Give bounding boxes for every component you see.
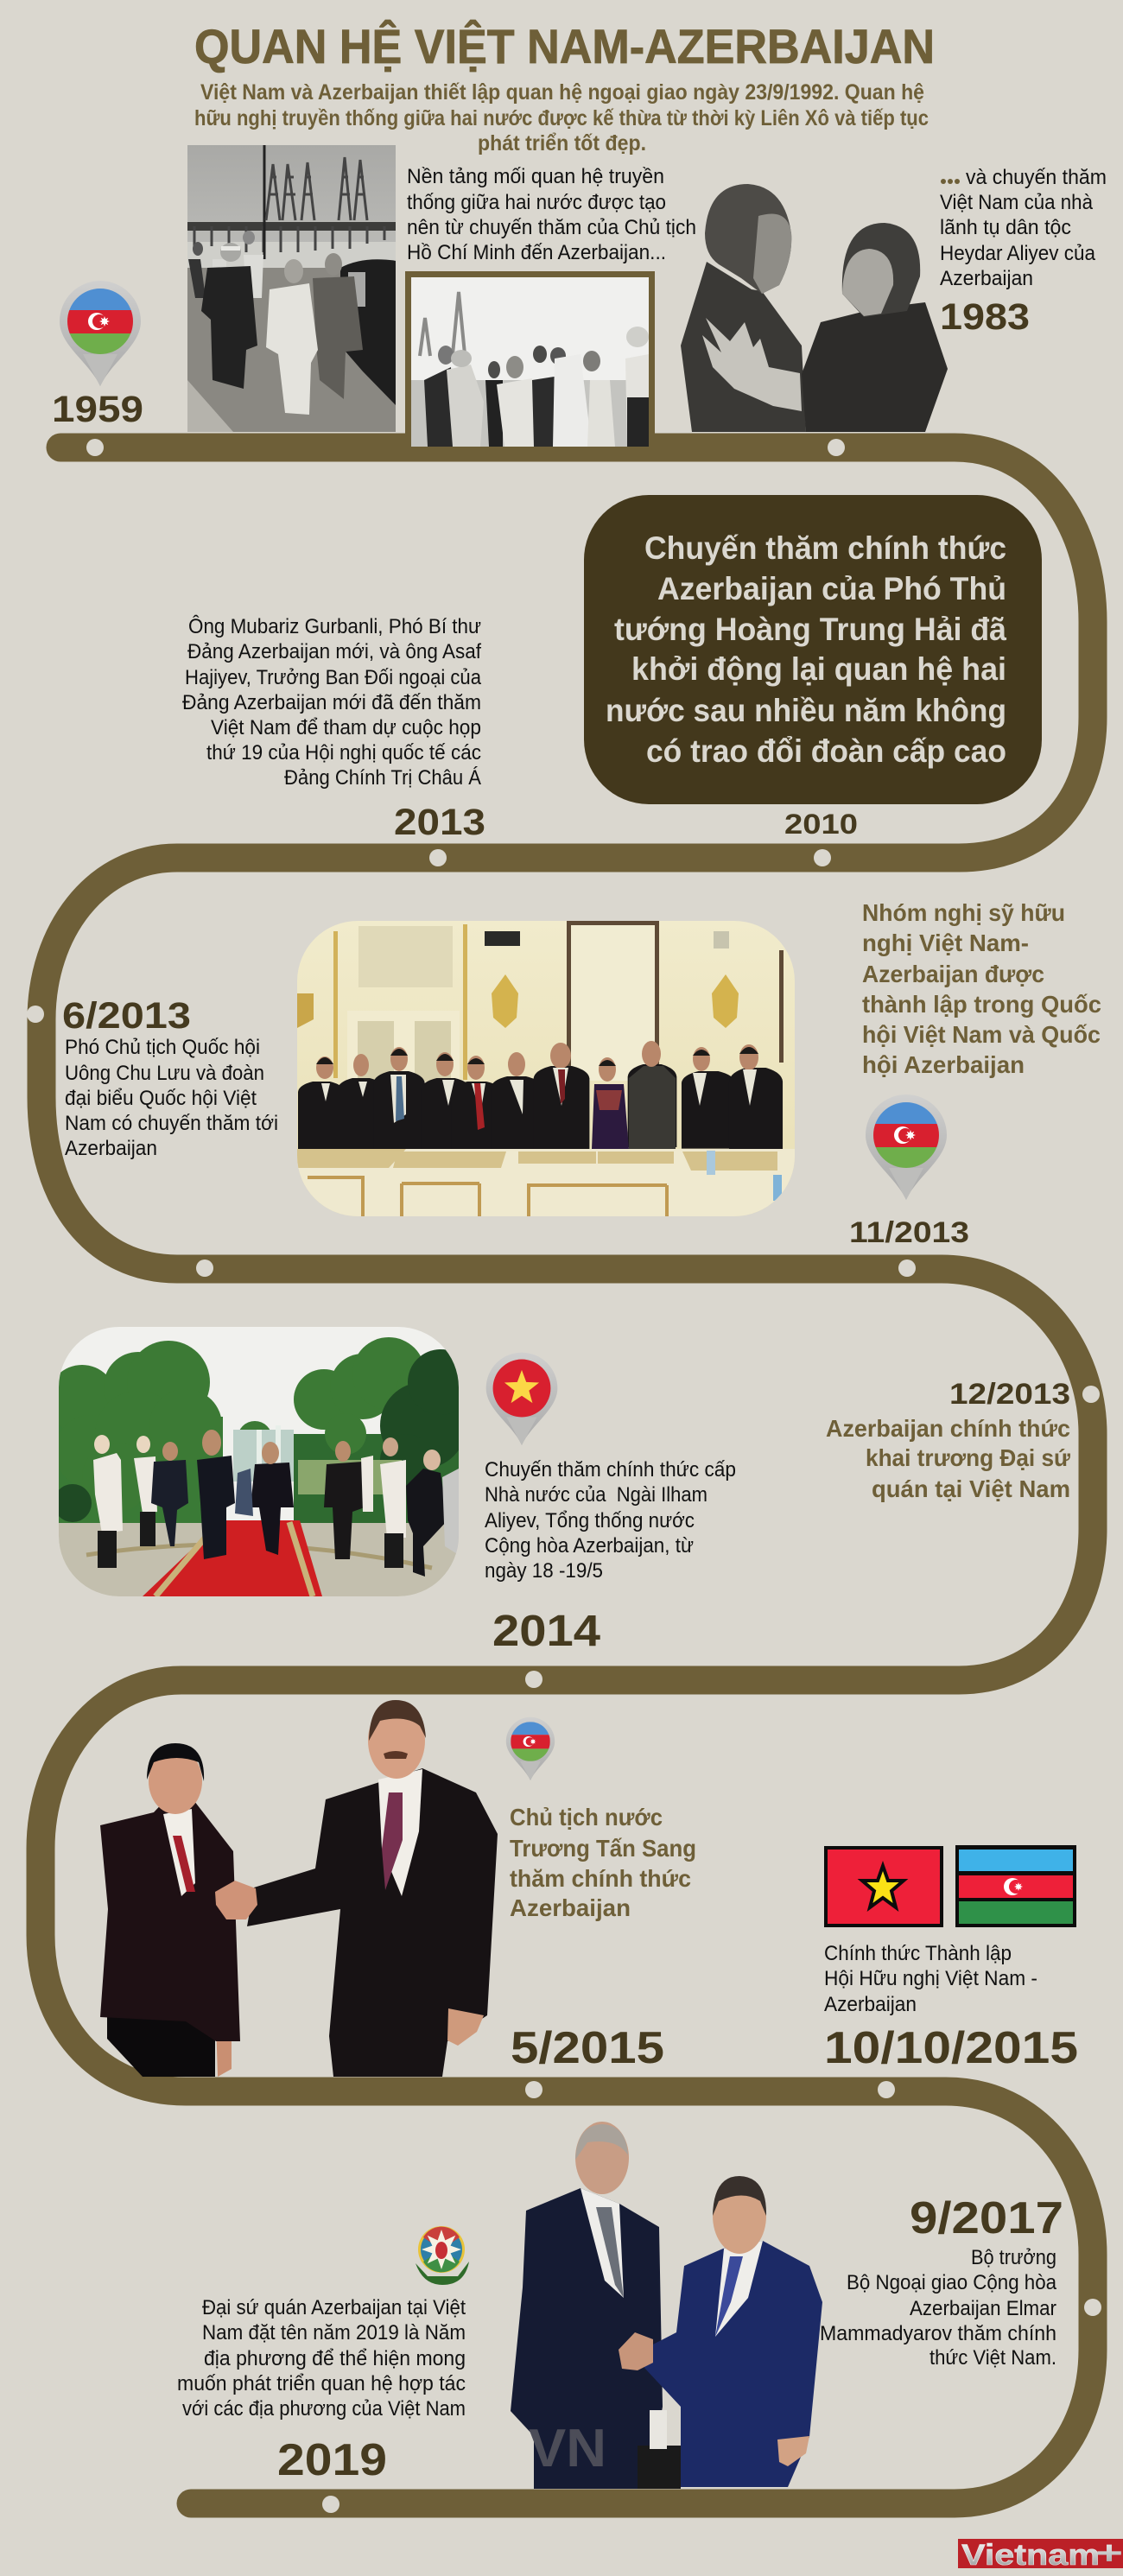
text: embassy opening: Azerbaijan chính thức (826, 1415, 1070, 1442)
text: friendship parliamentarians group: Nhóm nghị sỹ hữu (862, 899, 1065, 926)
text: foundation of relations: Nền tảng mối quan hệ truyền (407, 165, 664, 188)
text: friendship parliamentarians group: thành lập trong Quốc (862, 991, 1101, 1018)
text: friendship parliamentarians group: hội Azerbaijan (862, 1051, 1025, 1078)
text: Mammadyarov visit: Bộ trưởng (971, 2246, 1056, 2269)
year 11/2013: 11/2013 (849, 1216, 969, 1249)
photo: presidents handshake 2015 (100, 1700, 498, 2077)
text: Mammadyarov visit (820, 2246, 1057, 2370)
text: foundation of relations: thống giữa hai nước được tạo (407, 191, 666, 214)
panel: 2010 visit callout: khởi động lại quan hệ hai (631, 651, 1006, 687)
subtitle: hữu nghị truyền thống giữa hai nước được kế thừa từ thời kỳ Liên Xô và tiếp tục (194, 106, 929, 130)
panel: 2010 visit callout: Azerbaijan của Phó Thủ (657, 571, 1006, 606)
text: embassy opening: quán tại Việt Nam (872, 1475, 1070, 1502)
year 9/2017: 9/2017 (910, 2193, 1063, 2243)
text: friendship parliamentarians group: Azerbaijan được (862, 961, 1044, 987)
text: Heydar Aliyev visit: Việt Nam của nhà (940, 191, 1094, 214)
text: foundation of relations (407, 165, 696, 264)
panel: 2010 visit callout: có trao đổi đoàn cấp cao (646, 733, 1006, 769)
panel: 2010 visit callout: Chuyến thăm chính thức (644, 530, 1006, 566)
text: Truong Tan Sang visit (510, 1804, 696, 1921)
year 12/2013: 12/2013 (949, 1378, 1070, 1411)
text: 2013 party delegation: Hajiyev, Trưởng Ban Đối ngoại của (185, 666, 482, 689)
text: Truong Tan Sang visit: thăm chính thức (510, 1865, 691, 1892)
subtitle: Việt Nam và Azerbaijan thiết lập quan hệ ngoại giao ngày 23/9/1992. Quan hệ (200, 80, 924, 105)
text: 2014 state visit: ngày 18 -19/5 (485, 1559, 603, 1583)
photo: framed group visit (405, 271, 655, 447)
year 2010: 2010 (784, 809, 858, 840)
text: Truong Tan Sang visit: Chủ tịch nước (510, 1804, 663, 1830)
icon: Azerbaijan flag (955, 1845, 1076, 1927)
text: 2014 state visit (485, 1458, 736, 1583)
text: 2014 state visit: Aliyev, Tổng thống nước (485, 1509, 695, 1532)
text: friendship association (824, 1942, 1037, 2016)
photo: delegation group in hall (297, 921, 795, 1216)
text: 2019 year of localities: Đại sứ quán Azerbaijan tại Việt (202, 2296, 466, 2319)
text: 2013 party delegation: Việt Nam để tham dự cuộc họp (211, 716, 481, 739)
text: friendship parliamentarians group (862, 899, 1101, 1078)
text: 6/2013 National Assembly visit (65, 1036, 278, 1160)
text: foundation of relations: nên từ chuyến thăm của Chủ tịch (407, 216, 696, 239)
text: 2019 year of localities: với các địa phương của Việt Nam (182, 2397, 466, 2421)
text: Heydar Aliyev visit: Heydar Aliyev của (940, 242, 1096, 265)
text: Heydar Aliyev visit (940, 166, 1107, 290)
year 2019: 2019 (277, 2435, 387, 2485)
logo: Vietnam+: Vietnam (961, 2539, 1100, 2572)
subtitle (194, 80, 929, 155)
icon: Azerbaijan small pin (506, 1717, 555, 1780)
year 1983: 1983 (940, 296, 1030, 338)
year 6/2013: 6/2013 (62, 995, 191, 1037)
timeline road (27, 439, 1101, 2513)
text: friendship parliamentarians group: nghị Việt Nam- (862, 930, 1029, 956)
text: Heydar Aliyev visit: Azerbaijan (940, 267, 1033, 290)
panel: 2010 visit callout (584, 495, 1042, 804)
text: Mammadyarov visit: thức Việt Nam. (929, 2346, 1056, 2370)
text: 2014 state visit: Chuyến thăm chính thức cấp (485, 1458, 736, 1482)
photo: red carpet welcome (48, 1327, 473, 1596)
year 5/2015: 5/2015 (511, 2023, 664, 2073)
icon: Azerbaijan pin 1959 (60, 281, 141, 386)
year 1959: 1959 (52, 389, 143, 430)
photo: foreign minister and prime minister handshake (511, 2122, 822, 2489)
text: 2019 year of localities: muốn phát triển quan hệ hợp tác (177, 2372, 466, 2395)
icon: Azerbaijan emblem (416, 2226, 469, 2285)
photo: Ho Chi Minh in Baku (187, 145, 397, 432)
text: Mammadyarov visit: Azerbaijan Elmar (910, 2297, 1056, 2320)
text: embassy opening (826, 1415, 1071, 1502)
panel: 2010 visit callout: nước sau nhiều năm không (606, 693, 1006, 728)
panel: 2010 visit callout: tướng Hoàng Trung Hải đã (614, 612, 1006, 647)
year 2013: 2013 (394, 802, 485, 843)
text: 6/2013 National Assembly visit: Nam có chuyến thăm tới (65, 1112, 278, 1135)
photo: Heydar Aliyev embrace (681, 184, 948, 432)
text: 2013 party delegation: Đảng Chính Trị Châu Á (284, 766, 481, 790)
text: 2013 party delegation: Đảng Azerbaijan mới đã đến thăm (182, 691, 481, 714)
text: Heydar Aliyev visit: lãnh tụ dân tộc (940, 216, 1071, 239)
text: 2019 year of localities: địa phương để thể hiện mong (204, 2347, 466, 2370)
text: friendship parliamentarians group: hội Việt Nam và Quốc (862, 1021, 1101, 1048)
text: 2013 party delegation: Ông Mubariz Gurbanli, Phó Bí thư (188, 614, 481, 638)
text: Mammadyarov visit: Bộ Ngoại giao Cộng hòa (847, 2271, 1057, 2294)
text: 6/2013 National Assembly visit: Azerbaijan (65, 1137, 157, 1160)
title: QUAN HỆ VIỆT NAM-AZERBAIJAN (194, 19, 935, 73)
text: 6/2013 National Assembly visit: Phó Chủ tịch Quốc hội (65, 1036, 260, 1059)
text: friendship association: Hội Hữu nghị Việt Nam - (824, 1967, 1037, 1990)
year 10/10/2015: 10/10/2015 (824, 2023, 1078, 2073)
text: Heydar Aliyev visit: và chuyến thăm (966, 166, 1107, 189)
text: 2013 party delegation (182, 614, 482, 790)
text: embassy opening: khai trương Đại sứ (866, 1444, 1071, 1471)
text: 2014 state visit: Cộng hòa Azerbaijan, từ (485, 1534, 694, 1558)
text: 2019 year of localities (177, 2296, 466, 2421)
icon: Vietnam flag (824, 1846, 943, 1927)
text: friendship association: Azerbaijan (824, 1993, 917, 2016)
text: Truong Tan Sang visit: Azerbaijan (510, 1894, 631, 1921)
text: 6/2013 National Assembly visit: Uông Chu Lưu và đoàn (65, 1062, 264, 1085)
text: 2013 party delegation: thứ 19 của Hội nghị quốc tế các (206, 741, 481, 765)
logo: Vietnam+ (958, 2535, 1123, 2572)
text: 2013 party delegation: Đảng Azerbaijan mới, và ông Asaf (187, 640, 481, 663)
icon: Azerbaijan pin 11/2013 (866, 1094, 947, 1200)
logo: Vietnam+: + (1095, 2535, 1123, 2572)
text: Mammadyarov visit: Mammadyarov thăm chính (820, 2322, 1056, 2345)
text: foundation of relations: Hồ Chí Minh đến Azerbaijan... (407, 241, 666, 264)
icon: Vietnam pin (486, 1353, 557, 1445)
text: Truong Tan Sang visit: Trương Tấn Sang (510, 1835, 696, 1862)
watermark VN: VN (529, 2419, 606, 2478)
text: friendship association: Chính thức Thành lập (824, 1942, 1012, 1965)
subtitle: phát triển tốt đẹp. (478, 131, 646, 155)
text: 2014 state visit: Nhà nước của Ngài Ilham (485, 1483, 707, 1507)
text: 6/2013 National Assembly visit: đại biểu Quốc hội Việt (65, 1087, 257, 1110)
year 2014: 2014 (492, 1606, 601, 1655)
text: 2019 year of localities: Nam đặt tên năm 2019 là Năm (202, 2321, 466, 2344)
